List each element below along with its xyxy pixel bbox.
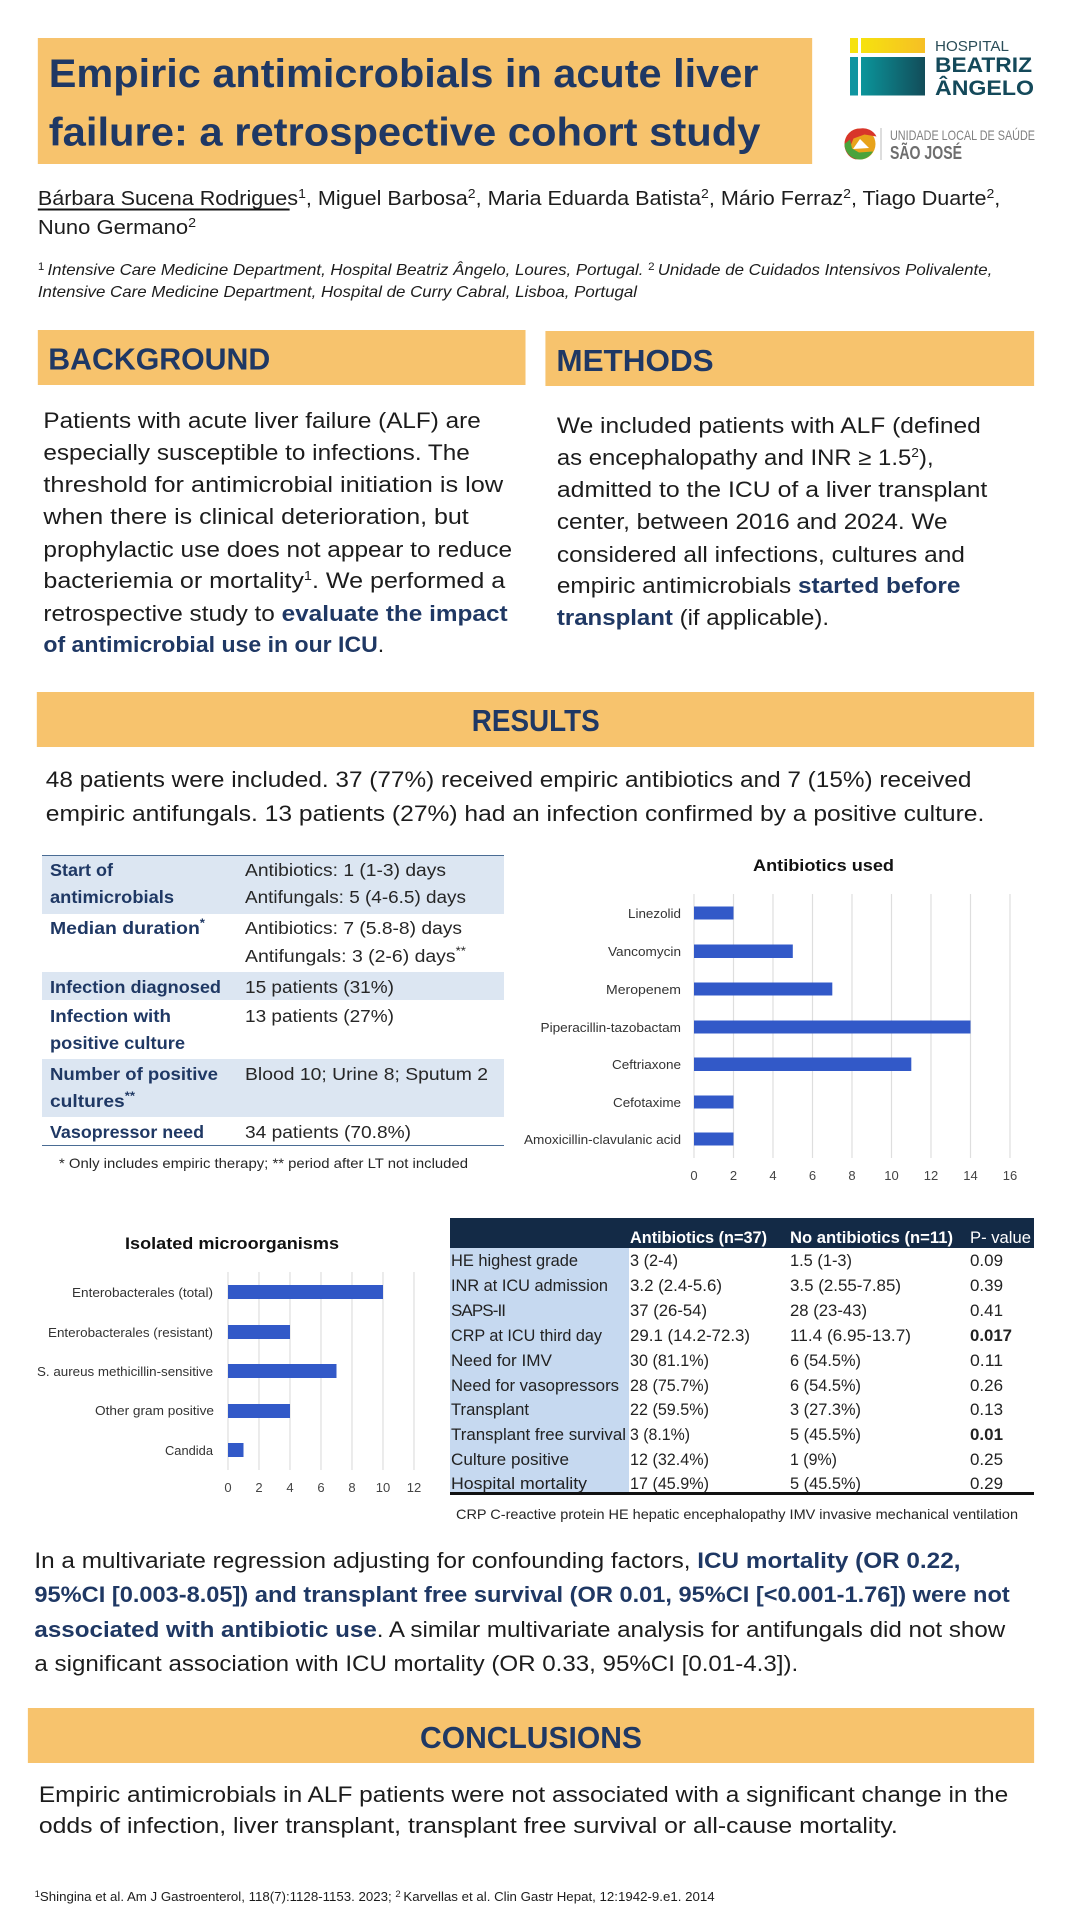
authors: , Mário Ferraz: [709, 188, 843, 210]
table: antibiotics vs no antibiotics: 11.4 (6.95-13.7): [790, 1326, 911, 1345]
table: antibiotics vs no antibiotics: 0.41: [970, 1301, 1003, 1320]
table: antimicrobial summary: Number of positive: [50, 1064, 218, 1084]
affiliations: Intensive Care Medicine Department, Hospital de Curry Cabral, Lisboa, Portugal: [38, 284, 637, 301]
bar chart: antibiotics used: 2: [730, 1168, 737, 1183]
text: conclusions: odds of infection, liver transplant, transplant free survival or all-cause mortality.: [39, 1813, 898, 1838]
table: antibiotics vs no antibiotics: 6 (54.5%): [790, 1376, 861, 1395]
bar chart: isolated microorganisms: S. aureus methicillin-sensitive: [37, 1364, 213, 1379]
table: antibiotics vs no antibiotics: 3.5 (2.55-7.85): [790, 1276, 901, 1295]
bar chart: antibiotics used: 0: [690, 1168, 698, 1183]
bar chart: antibiotics used: Ceftriaxone: [612, 1057, 681, 1072]
table: antibiotics vs no antibiotics: 28 (75.7%): [630, 1376, 709, 1395]
text: methods body: admitted to the ICU of a liver transplant: [557, 477, 988, 502]
bar chart: antibiotics used: Amoxicillin-clavulanic acid: [524, 1132, 681, 1147]
table: antibiotics vs no antibiotics: 6 (54.5%): [790, 1351, 861, 1370]
table: antibiotics vs no antibiotics: No antibiotics (n=11): [790, 1228, 953, 1247]
authors: Bárbara Sucena Rodrigues: [38, 188, 278, 210]
authors: , Maria Eduarda Batista: [476, 188, 702, 210]
bar chart: isolated microorganisms: 10: [376, 1480, 390, 1495]
table: antibiotics vs no antibiotics: Hospital mortality: [451, 1474, 588, 1493]
authors: 2: [468, 186, 476, 201]
text: methods body: transplant (if applicable).: [557, 605, 829, 630]
authors: 2: [986, 186, 994, 201]
table: antibiotics vs no antibiotics: 3 (8.1%): [630, 1425, 690, 1444]
heading: results: RESULTS: [472, 703, 600, 738]
authors: 2: [188, 215, 196, 230]
bar chart: antibiotics used: Meropenem: [606, 982, 681, 997]
logo: Unidade Local de Saúde São José: UNIDADE LOCAL DE SAÚDE: [890, 127, 1035, 143]
table: antimicrobial summary: cultures: [50, 1091, 118, 1111]
table: antibiotics vs no antibiotics: Antibiotics (n=37): [630, 1228, 767, 1247]
table: antimicrobial summary: 13 patients (27%): [245, 1006, 394, 1026]
bar chart: antibiotics used: 10: [884, 1168, 899, 1183]
bar chart: antibiotics used: 4: [769, 1168, 777, 1183]
affiliations: Unidade de Cuidados Intensivos Polivalente,: [658, 262, 992, 279]
bar chart: isolated microorganisms: 8: [348, 1480, 356, 1495]
table: antimicrobial summary: Infection diagnosed: [50, 977, 221, 997]
logo: Hospital Beatriz Ângelo: BEATRIZ: [935, 54, 1032, 77]
heading: methods: METHODS: [556, 343, 714, 378]
bar chart: isolated microorganisms: 0: [224, 1480, 232, 1495]
table: antibiotics vs no antibiotics: 0.01: [970, 1425, 1003, 1444]
logo: Unidade Local de Saúde São José: SÃO JOSÉ: [890, 142, 962, 163]
text: background body: [42, 408, 512, 657]
table: antibiotics vs no antibiotics: 0.29: [970, 1474, 1003, 1493]
bar chart: antibiotics used: Cefotaxime: [613, 1095, 681, 1110]
bar chart: antibiotics used: Linezolid: [628, 906, 681, 921]
heading: methods: [545, 331, 1034, 386]
logo: Hospital Beatriz Ângelo: HOSPITAL: [935, 38, 1009, 55]
text: methods body: center, between 2016 and 2024. We: [557, 509, 948, 534]
table: antibiotics vs no antibiotics: 22 (59.5%): [630, 1400, 709, 1419]
references: Shingina et al. Am J Gastroenterol, 118(7):1128-1153. 2023;: [40, 1890, 395, 1904]
logo: Hospital Beatriz Ângelo: ÂNGELO: [935, 76, 1034, 100]
text: methods body: empiric antimicrobials started before: [557, 573, 960, 598]
text: methods body: 2: [911, 445, 919, 460]
heading: background: [38, 330, 526, 385]
table: antibiotics vs no antibiotics: [450, 1218, 1034, 1495]
chart title: Isolated microorganisms: [125, 1234, 339, 1253]
text: methods body: ),: [919, 445, 934, 470]
authors: , Tiago Duarte: [851, 188, 986, 210]
table: antibiotics vs no antibiotics: 1 (9%): [790, 1450, 837, 1469]
text: results summary: [46, 767, 984, 826]
table: antibiotics vs no antibiotics: HE highest grade: [451, 1251, 578, 1270]
text: methods body: considered all infections, cultures and: [557, 542, 965, 567]
table: antimicrobial summary: Antibiotics: 1 (1-3) days: [245, 860, 446, 880]
bar chart: antibiotics used: Piperacillin-tazobactam: [540, 1020, 681, 1035]
table: antimicrobial summary: Antifungals: 3 (2-6) days: [245, 946, 435, 966]
bar chart: antibiotics used: 8: [848, 1168, 856, 1183]
table: antibiotics vs no antibiotics: Culture positive: [451, 1450, 569, 1469]
text: methods body: We included patients with ALF (defined: [557, 413, 981, 438]
table: antimicrobial summary: antimicrobials: [50, 887, 174, 907]
affiliations: 1: [38, 261, 47, 273]
text: conclusions: [39, 1782, 1008, 1838]
table: antibiotics vs no antibiotics: Need for IMV: [451, 1351, 553, 1370]
panel: background: [38, 330, 526, 657]
text: background body: retrospective study to evaluate the impact: [43, 601, 508, 626]
table: antimicrobial summary: 15 patients (31%): [245, 977, 394, 997]
bar chart: isolated microorganisms: 4: [286, 1480, 294, 1495]
table: antimicrobial summary: Blood 10; Urine 8; Sputum 2: [245, 1064, 488, 1084]
bar chart: antibiotics used: 6: [809, 1168, 816, 1183]
table: antibiotics vs no antibiotics: 5 (45.5%): [790, 1425, 861, 1444]
text: conclusions: Empiric antimicrobials in ALF patients were not associated with a significant change in the: [39, 1782, 1008, 1807]
heading: conclusions: [28, 1708, 1034, 1763]
table: antibiotics vs no antibiotics: 3.2 (2.4-5.6): [630, 1276, 722, 1295]
table: antimicrobial summary: [42, 855, 504, 1146]
table: antimicrobial summary: Median duration: [50, 918, 185, 938]
title: Empiric antimicrobials in acute liver: [49, 52, 758, 96]
table: antimicrobial summary: Antifungals: 5 (4-6.5) days: [245, 887, 466, 907]
table: antibiotics vs no antibiotics: 1.5 (1-3): [790, 1251, 852, 1270]
authors: [38, 186, 1000, 239]
text: methods body: [557, 413, 988, 630]
authors: , Miguel Barbosa: [306, 188, 469, 210]
table footnote: * Only includes empiric therapy; ** period after LT not included: [59, 1155, 468, 1171]
table: antibiotics vs no antibiotics: 37 (26-54): [630, 1301, 707, 1320]
authors: 1: [298, 186, 306, 201]
text: results summary: empiric antifungals. 13 patients (27%) had an infection confirmed by a positive culture.: [46, 801, 984, 826]
text: methods body: as encephalopathy and INR ≥ 1.5: [557, 445, 889, 470]
table: antibiotics vs no antibiotics: 30 (81.1%): [630, 1351, 709, 1370]
bar chart: antibiotics used: [524, 856, 1017, 1183]
text: background body: prophylactic use does not appear to reduce: [43, 537, 512, 562]
affiliations: [38, 260, 992, 301]
table: antibiotics vs no antibiotics: INR at ICU admission: [451, 1276, 608, 1295]
bar chart: antibiotics used: 16: [1003, 1168, 1017, 1183]
title: failure: a retrospective cohort study: [49, 110, 760, 155]
text: background body: of antimicrobial use in our ICU .: [43, 632, 384, 657]
table: antibiotics vs no antibiotics: 28 (23-43): [790, 1301, 867, 1320]
table: antibiotics vs no antibiotics: P- value: [970, 1228, 1031, 1247]
heading: conclusions: CONCLUSIONS: [420, 1720, 642, 1755]
affiliations: 2: [648, 261, 658, 273]
references: Karvellas et al. Clin Gastr Hepat, 12:1942-9.e1. 2014: [403, 1890, 715, 1904]
table: antibiotics vs no antibiotics: Transplant free survival: [451, 1425, 626, 1444]
table: antibiotics vs no antibiotics: 12 (32.4%): [630, 1450, 709, 1469]
text: background body: . We performed a: [312, 568, 506, 593]
table: antimicrobial summary: positive culture: [50, 1033, 185, 1053]
table: antibiotics vs no antibiotics: Transplant: [451, 1400, 529, 1419]
text: multivariate regression: In a multivariate regression adjusting for confounding factors, ICU mortality (OR 0.22,: [34, 1548, 960, 1573]
table: antibiotics vs no antibiotics: 0.39: [970, 1276, 1003, 1295]
text: multivariate regression: a significant association with ICU mortality (OR 0.33, 95%CI [0.01-4.3]).: [34, 1651, 798, 1676]
table: antimicrobial summary: **: [125, 1089, 135, 1103]
logo: Unidade Local de Saúde São José: [844, 127, 1035, 163]
text: multivariate regression: associated with antibiotic use . A similar multivariate analysis for antifungals did not show: [34, 1617, 1006, 1642]
bar chart: antibiotics used: 14: [963, 1168, 978, 1183]
table: antimicrobial summary: Infection with: [50, 1006, 171, 1026]
bar chart: antibiotics used: Vancomycin: [608, 944, 681, 959]
bar chart: isolated microorganisms: Enterobacterales (resistant): [48, 1325, 213, 1340]
bar chart: isolated microorganisms: 2: [255, 1480, 263, 1495]
table: antibiotics vs no antibiotics: 3 (2-4): [630, 1251, 678, 1270]
table: antibiotics vs no antibiotics: 29.1 (14.2-72.3): [630, 1326, 750, 1345]
chart title: Antibiotics used: [753, 856, 894, 875]
authors: Nuno Germano: [38, 217, 174, 239]
text: background body: bacteriemia or mortality: [43, 568, 276, 593]
bar chart: isolated microorganisms: Enterobacterales (total): [72, 1285, 213, 1300]
text: background body: especially susceptible to infections. The: [43, 440, 470, 465]
bar chart: antibiotics used: 12: [924, 1168, 938, 1183]
table: antimicrobial summary: 34 patients (70.8%): [245, 1122, 411, 1142]
logo: Hospital Beatriz Ângelo: [850, 38, 1034, 100]
references: 1: [35, 1889, 40, 1899]
text: background body: threshold for antimicrobial initiation is low: [43, 472, 504, 497]
table: antibiotics vs no antibiotics: 0.13: [970, 1400, 1003, 1419]
table: antibiotics vs no antibiotics: 0.11: [970, 1351, 1003, 1370]
text: multivariate regression: [34, 1548, 1010, 1676]
affiliations: Intensive Care Medicine Department, Hospital Beatriz Ângelo, Loures, Portugal.: [47, 260, 648, 279]
title: [38, 38, 812, 164]
table: antibiotics vs no antibiotics: 0.26: [970, 1376, 1003, 1395]
panel: methods: [545, 331, 1034, 630]
authors: 2: [701, 186, 709, 201]
table: antibiotics vs no antibiotics: 0.09: [970, 1251, 1003, 1270]
table: antibiotics vs no antibiotics: 0.25: [970, 1450, 1003, 1469]
table abbreviations note: CRP C-reactive protein HE hepatic encephalopathy IMV invasive mechanical ventilation: [456, 1506, 1018, 1522]
bar chart: isolated microorganisms: Candida: [165, 1443, 214, 1458]
table: antibiotics vs no antibiotics: Need for vasopressors: [451, 1376, 619, 1395]
table: antimicrobial summary: Antibiotics: 7 (5.8-8) days: [245, 918, 462, 938]
text: background body: 1: [304, 568, 312, 583]
authors: ,: [994, 188, 1000, 210]
text: background body: Patients with acute liver failure (ALF) are: [43, 408, 481, 433]
bar chart: isolated microorganisms: Other gram positive: [95, 1403, 214, 1418]
bar chart: isolated microorganisms: 12: [407, 1480, 421, 1495]
table: antibiotics vs no antibiotics: 5 (45.5%): [790, 1474, 861, 1493]
table: antibiotics vs no antibiotics: SAPS-II: [451, 1301, 506, 1320]
table: antimicrobial summary: *: [200, 916, 205, 930]
text: background body: when there is clinical deterioration, but: [42, 504, 470, 529]
authors: 2: [843, 186, 851, 201]
references: 2: [395, 1889, 403, 1899]
bar chart: isolated microorganisms: 6: [317, 1480, 325, 1495]
heading: results: [37, 692, 1034, 747]
table: antibiotics vs no antibiotics: CRP at ICU third day: [451, 1326, 602, 1345]
table: antimicrobial summary: **: [456, 944, 466, 958]
heading: background: BACKGROUND: [48, 341, 270, 377]
text: results summary: 48 patients were included. 37 (77%) received empiric antibiotics and 7 (15%) received: [46, 767, 971, 792]
table: antibiotics vs no antibiotics: 17 (45.9%): [630, 1474, 709, 1493]
text: multivariate regression: 95%CI [0.003-8.05]) and transplant free survival (OR 0.01, 95%CI [<0.001-1.76]) were not: [34, 1582, 1010, 1607]
table: antimicrobial summary: Vasopressor need: [50, 1122, 204, 1142]
bar chart: isolated microorganisms: [37, 1234, 421, 1495]
table: antibiotics vs no antibiotics: 0.017: [970, 1326, 1012, 1345]
table: antimicrobial summary: Start of: [50, 860, 113, 880]
table: antibiotics vs no antibiotics: 3 (27.3%): [790, 1400, 861, 1419]
